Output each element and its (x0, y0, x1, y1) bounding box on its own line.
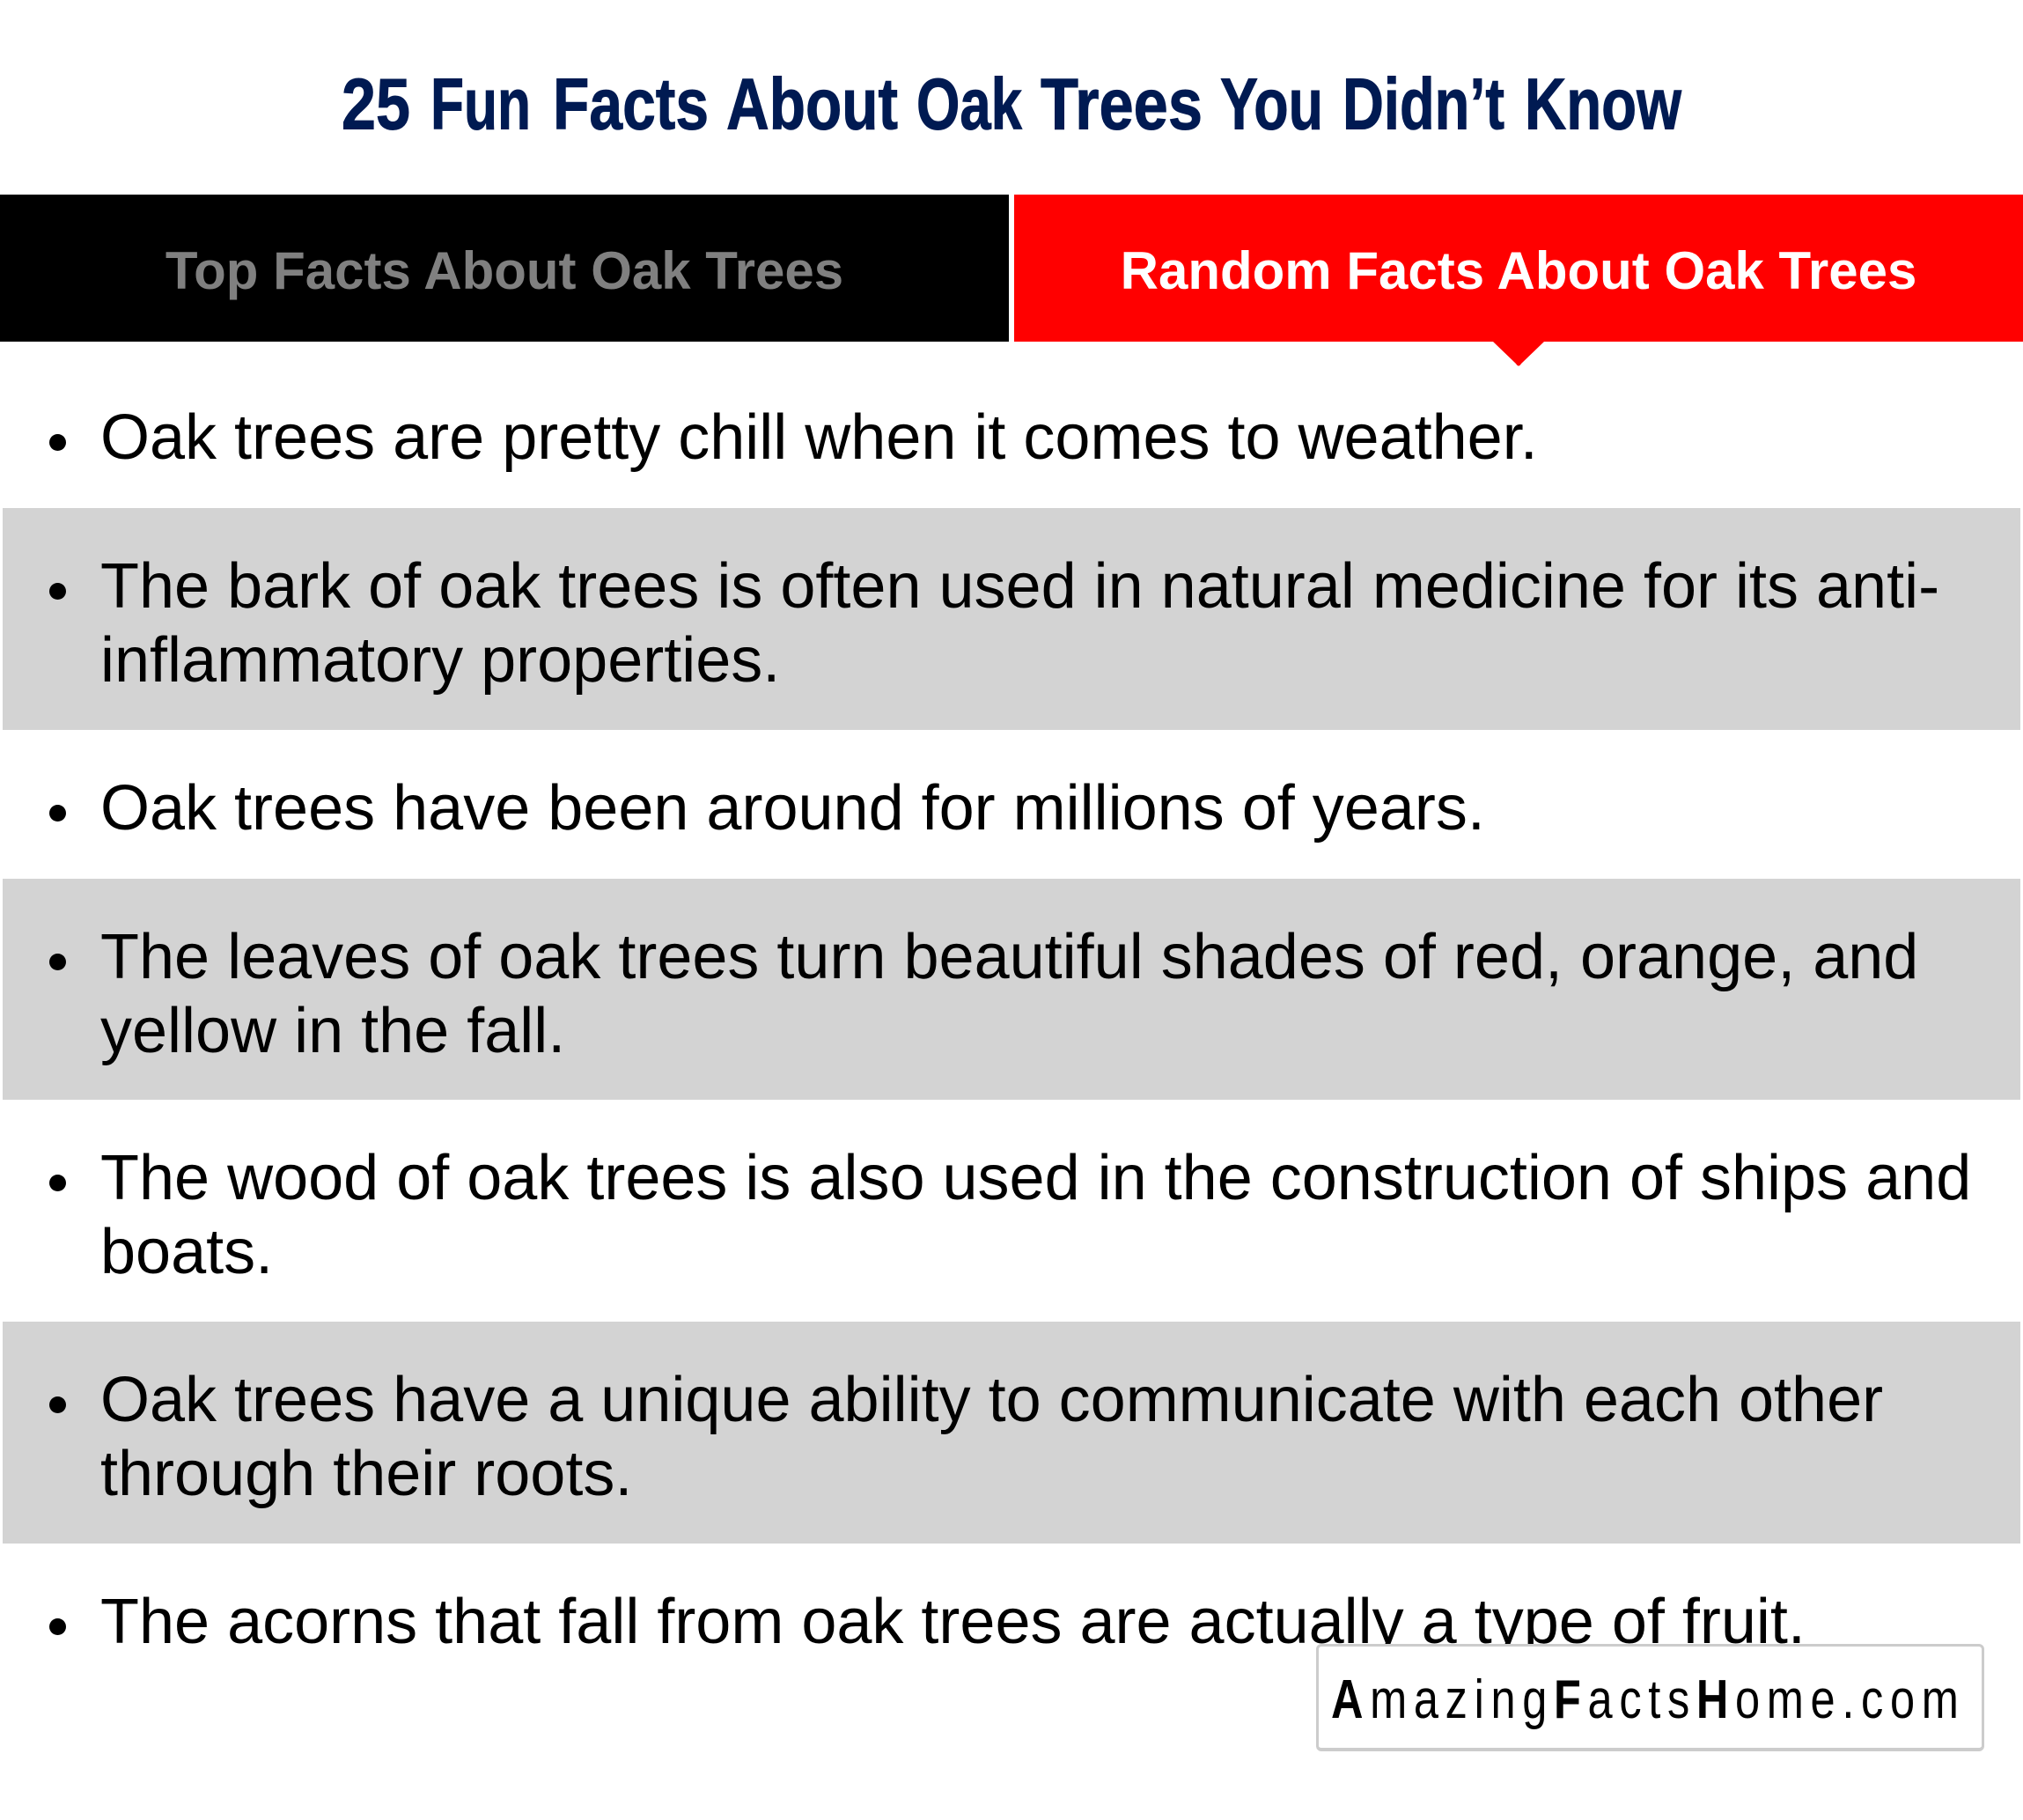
fact row 2 (3, 508, 2020, 730)
fact text: boats. (100, 1217, 273, 1287)
bullet (49, 583, 66, 600)
bullet (49, 434, 66, 451)
tab: random facts: Random Facts About Oak Trees (1121, 241, 1916, 300)
bullet (49, 954, 66, 970)
fact text (100, 551, 1939, 696)
title: About (726, 63, 898, 144)
fact text (100, 1365, 1883, 1509)
title: Oak (916, 63, 1023, 144)
fact text: Oak trees have a unique ability to communicate with each other (100, 1365, 1883, 1435)
title: You (1220, 63, 1323, 144)
fact row 4 (3, 879, 2020, 1100)
fact text: yellow in the fall. (100, 996, 565, 1066)
title: Fun (430, 63, 531, 144)
bullet (49, 1175, 66, 1191)
title: Know (1525, 63, 1681, 144)
bullet (49, 805, 66, 822)
title: Facts (553, 63, 709, 144)
tab: top facts: Top Facts About Oak Trees (166, 241, 843, 300)
bullet (49, 1618, 66, 1635)
title: Didn’t (1343, 63, 1504, 144)
title: 25 (342, 63, 410, 144)
bullet (49, 1396, 66, 1413)
fact text: inflammatory properties. (100, 625, 780, 696)
fact row 5 (49, 1143, 1971, 1287)
fact row 1 (49, 402, 1538, 473)
fact text: The leaves of oak trees turn beautiful shades of red, orange, and (100, 922, 1918, 992)
fact row 6 (3, 1322, 2020, 1544)
tab: random facts (1014, 195, 2023, 342)
fact text (100, 1143, 1971, 1287)
fact row 3 (49, 773, 1485, 844)
title: Trees (1041, 63, 1203, 144)
fact row 7 (49, 1587, 1806, 1644)
fact text (100, 922, 1918, 1066)
icon: active tab pointer (1493, 342, 1544, 366)
watermark text: AmazingFactsHome.com (1331, 1669, 1965, 1730)
watermark badge (1316, 1644, 1984, 1751)
fact text: The wood of oak trees is also used in the construction of ships and (100, 1143, 1971, 1213)
fact text: through their roots. (100, 1439, 632, 1509)
fact text: Oak trees are pretty chill when it comes to weather. (100, 402, 1538, 473)
fact text: The bark of oak trees is often used in natural medicine for its anti- (100, 551, 1939, 622)
title (342, 63, 1682, 144)
fact text: Oak trees have been around for millions of years. (100, 773, 1485, 844)
tab: top facts (0, 195, 1009, 342)
